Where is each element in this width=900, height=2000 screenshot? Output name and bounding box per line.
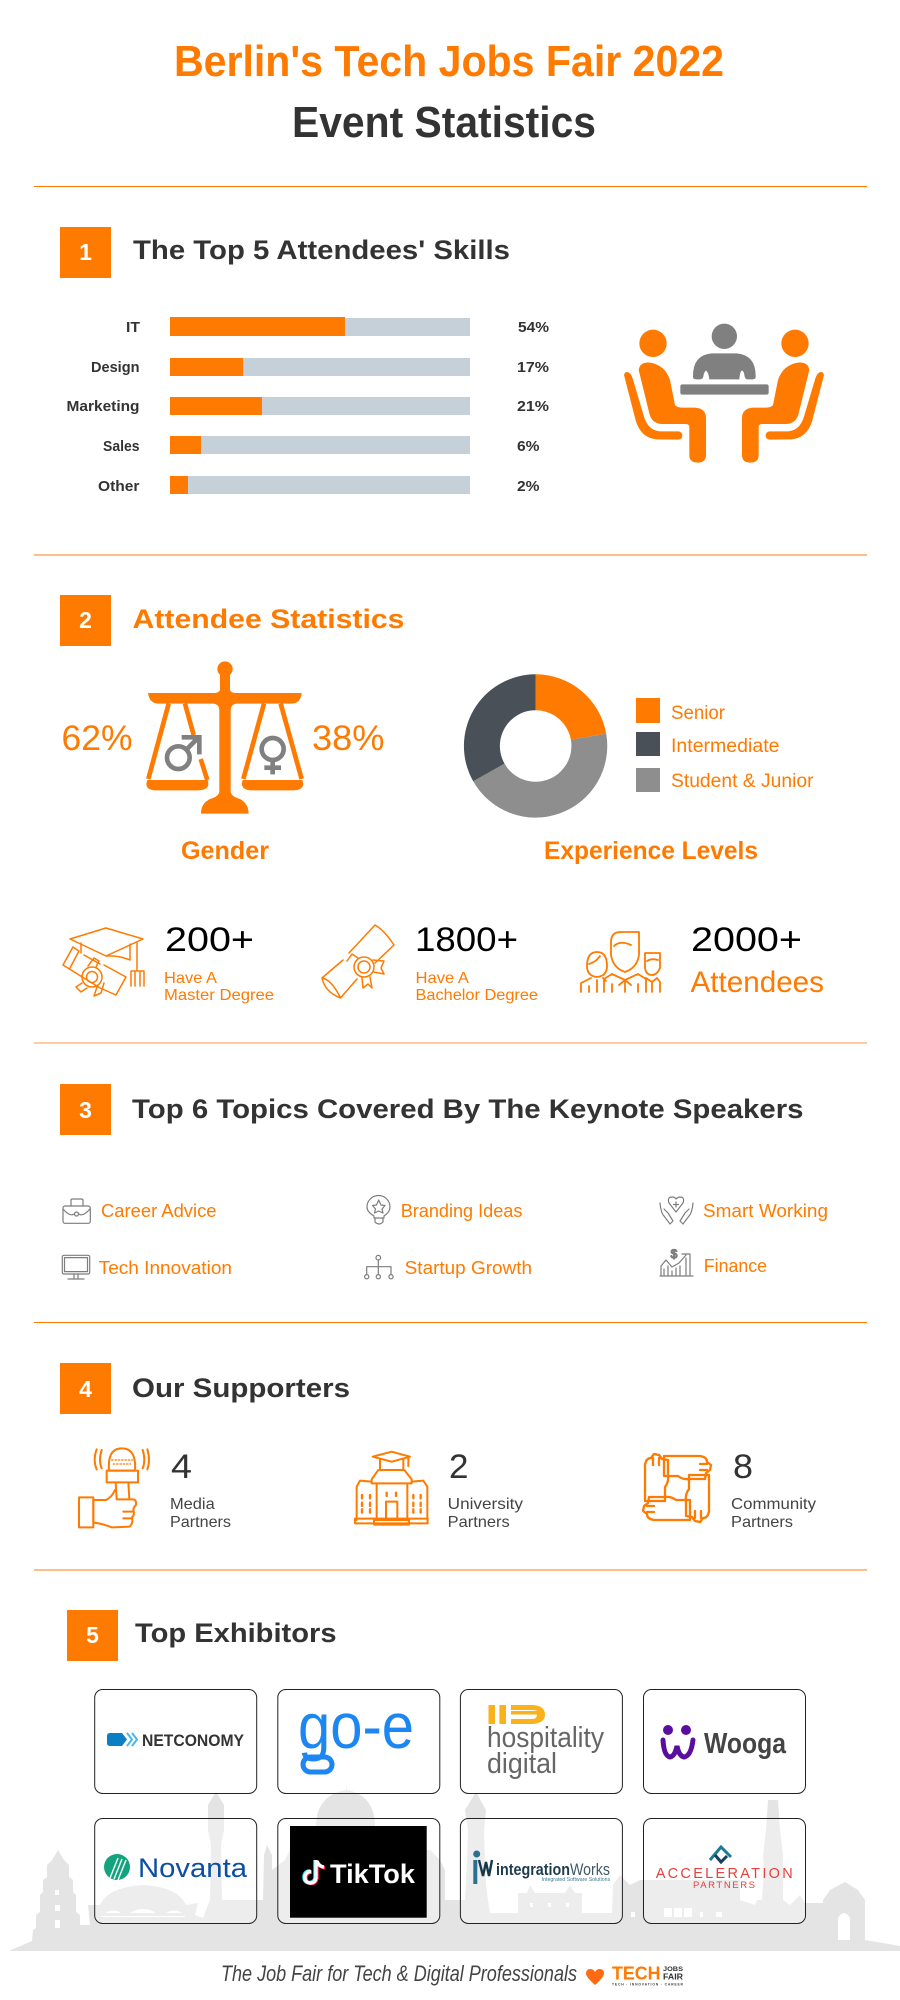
logo card: Novanta: Novanta: [138, 1853, 248, 1883]
logo card: Acceleration Partners: PARTNERS: [693, 1880, 755, 1891]
icon: microphone in hand: [79, 1448, 149, 1527]
stat: master degree: 200+: [165, 921, 254, 959]
icon: four joined hands: [643, 1454, 711, 1522]
heading: supporters: Our Supporters: [132, 1373, 350, 1403]
stat: media partners: Media: [170, 1496, 215, 1513]
topic: tech innovation: [62, 1255, 232, 1279]
skyline silhouette: [9, 1782, 900, 1951]
heading: top exhibitors: Top Exhibitors: [135, 1618, 336, 1648]
icon: people meeting at table: [624, 324, 824, 463]
stat: bachelor degree: Bachelor Degree: [416, 987, 538, 1004]
stat: total attendees: 2000+: [691, 921, 802, 959]
logo: Tech Jobs Fair: [612, 1964, 684, 1986]
panel: top exhibitors: [67, 1610, 806, 1924]
icon: gender balance scale: [146, 661, 303, 814]
logo card: integrationWorks: [460, 1818, 622, 1924]
stat: master degree: Have A: [164, 970, 217, 987]
logo card: Novanta: [95, 1818, 257, 1924]
section number 5: 5: [86, 1622, 99, 1648]
heading: attendee statistics: Attendee Statistics: [132, 604, 404, 634]
stat: 62 percent male: 62%: [62, 719, 132, 758]
icon: university building: [355, 1452, 428, 1525]
topic: smart working: [660, 1197, 828, 1224]
bar chart: skills: 17%: [517, 359, 549, 376]
bar chart: skills: [66, 317, 549, 495]
stat: media partners: Partners: [170, 1514, 231, 1531]
logo card: TikTok: TikTok: [330, 1859, 416, 1889]
footer tagline: The Job Fair for Tech & Digital Professionals: [221, 1961, 577, 1986]
stat: master degree: [164, 921, 274, 1004]
topic: tech innovation: Tech Innovation: [99, 1257, 232, 1278]
logo card: Acceleration Partners: ACCELERATION: [656, 1866, 793, 1882]
topic: finance: Finance: [704, 1255, 767, 1276]
panel: keynote topics: [60, 1084, 828, 1279]
logo card: Netconomy: [95, 1690, 257, 1794]
stat: university partners: [448, 1448, 523, 1531]
title line 2: Event Statistics: [292, 98, 596, 147]
stat: community partners: Community: [731, 1496, 816, 1513]
logo: Tech Jobs Fair: TECH: [612, 1964, 660, 1984]
section number 3: 3: [79, 1097, 92, 1123]
topic: career advice: [63, 1199, 216, 1223]
topic: branding ideas: [367, 1196, 522, 1224]
label: experience levels: Experience Levels: [544, 837, 758, 865]
stat: community partners: 8: [733, 1448, 753, 1486]
bar chart: skills: Design: [91, 359, 140, 376]
stat: master degree: Master Degree: [164, 987, 274, 1004]
section number 4: 4: [79, 1376, 92, 1402]
logo card: go-e: go-e: [298, 1690, 414, 1762]
logo card: Wooga: Wooga: [704, 1728, 787, 1760]
panel: top 5 attendee skills: [60, 227, 824, 495]
topic: startup growth: Startup Growth: [405, 1257, 532, 1278]
stat: community partners: [731, 1448, 816, 1531]
topic: branding ideas: Branding Ideas: [401, 1200, 522, 1221]
stat: university partners: Partners: [448, 1514, 510, 1531]
logo card: hospitality digital: digital: [487, 1748, 557, 1780]
topic: startup growth: [365, 1255, 532, 1279]
stat: media partners: 4: [171, 1448, 192, 1486]
stat: university partners: 2: [449, 1448, 468, 1486]
panel: supporters: [60, 1363, 816, 1531]
stat: bachelor degree: [415, 921, 538, 1004]
section number 1: [60, 227, 111, 278]
topic: career advice: Career Advice: [101, 1200, 216, 1221]
bar chart: skills: IT: [126, 319, 140, 336]
bar chart: skills: Sales: [103, 438, 140, 455]
topic: finance: [660, 1247, 767, 1276]
logo card: integrationWorks: integration: [496, 1860, 570, 1879]
logo: Tech Jobs Fair: FAIR: [663, 1972, 683, 1982]
label: gender: Gender: [181, 837, 269, 865]
stat: total attendees: [690, 921, 824, 999]
logo card: integrationWorks: Integrated Software Solutions: [542, 1877, 611, 1883]
stat: community partners: Partners: [731, 1514, 793, 1531]
section number 1: 1: [79, 239, 92, 265]
bar chart: skills: 2%: [517, 478, 540, 495]
bar chart: skills: 54%: [518, 319, 549, 336]
logo: Tech Jobs Fair: TECH · INNOVATION · CAREER: [612, 1982, 684, 1986]
stat: 38 percent female: 38%: [312, 719, 384, 758]
panel: attendee statistics: [60, 595, 824, 1004]
bar chart: skills: 21%: [517, 398, 549, 415]
legend: experience levels: Senior: [671, 703, 726, 724]
logo card: Acceleration Partners: [644, 1818, 806, 1924]
title line 1: Berlin's Tech Jobs Fair 2022: [174, 37, 724, 86]
topic: finance: $: [671, 1247, 678, 1261]
donut chart: experience levels: [464, 674, 607, 818]
logo card: Netconomy: NETCONOMY: [142, 1731, 245, 1750]
stat: university partners: University: [448, 1496, 523, 1513]
heading: skills: The Top 5 Attendees' Skills: [133, 235, 510, 265]
logo: Tech Jobs Fair: JOBS: [663, 1966, 684, 1973]
icon: heart: [586, 1969, 604, 1985]
footer: [221, 1961, 684, 1986]
section number 2: 2: [79, 607, 92, 633]
heading: keynote topics: Top 6 Topics Covered By The Keynote Speakers: [132, 1094, 804, 1124]
stat: bachelor degree: Have A: [416, 970, 469, 987]
legend: experience levels: Student & Junior: [671, 771, 814, 792]
section number 3: [60, 1084, 111, 1135]
stat: media partners: [170, 1448, 231, 1531]
icon: diploma scroll: [322, 925, 394, 998]
logo card: hospitality digital: hospitality: [487, 1722, 604, 1754]
section number 2: [60, 595, 111, 646]
bar chart: skills: Other: [98, 478, 140, 495]
logo card: Wooga: [644, 1690, 806, 1794]
icon: graduation cap and diploma: [63, 928, 144, 996]
bar chart: skills: 6%: [517, 438, 540, 455]
logo card: go-e: [278, 1690, 440, 1794]
section number 5: [67, 1610, 118, 1661]
title: [174, 37, 724, 147]
legend: experience levels: [636, 698, 814, 792]
stat: total attendees: Attendees: [690, 966, 824, 999]
bar chart: skills: Marketing: [66, 398, 140, 415]
section number 4: [60, 1363, 111, 1414]
logo card: integrationWorks: Works: [570, 1860, 610, 1879]
legend: experience levels: Intermediate: [671, 736, 780, 757]
logo card: TikTok: [278, 1818, 440, 1924]
logo card: hospitality digital: [460, 1690, 622, 1794]
icon: group of attendees: [581, 932, 660, 992]
stat: bachelor degree: 1800+: [415, 921, 518, 959]
topic: smart working: Smart Working: [703, 1200, 828, 1221]
